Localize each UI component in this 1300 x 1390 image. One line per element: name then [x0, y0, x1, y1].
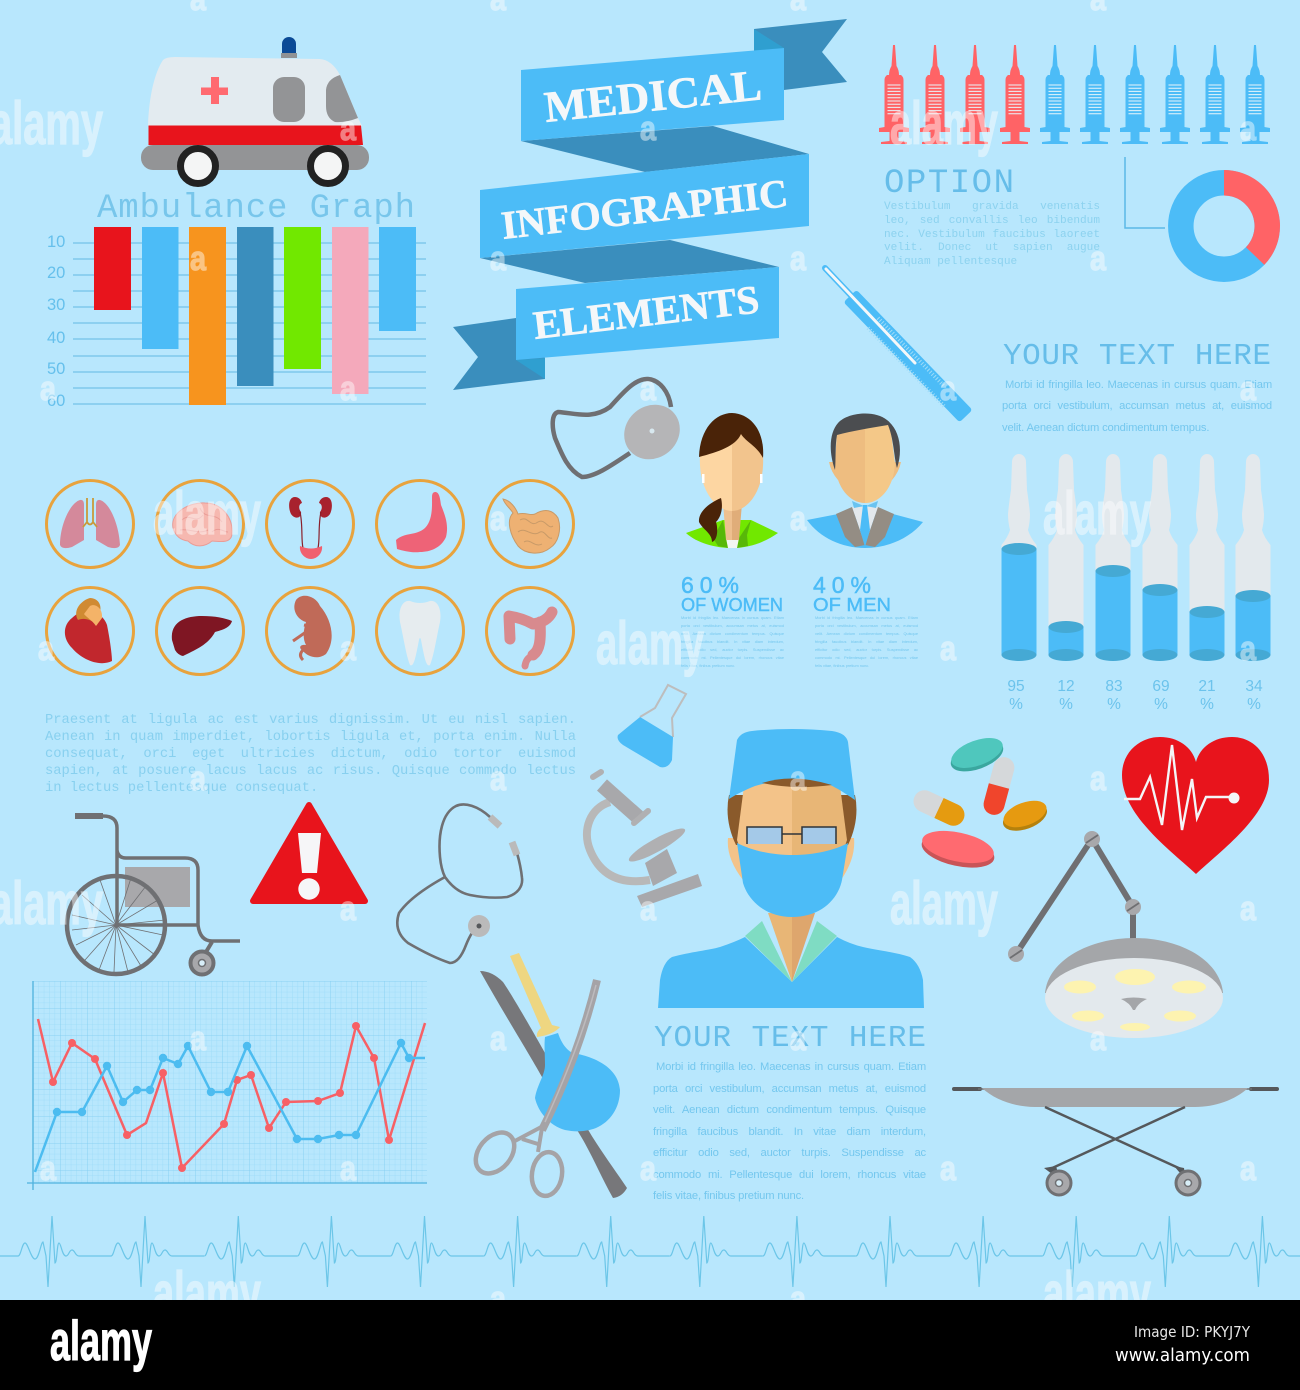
icon: surgical tools	[468, 953, 627, 1198]
surgeon face	[737, 780, 792, 855]
icon: microscope	[587, 772, 702, 907]
man ears	[829, 462, 901, 480]
footer url: www.alamy.com	[1115, 1345, 1250, 1366]
ampoule percentage labels: 95	[1007, 678, 1025, 695]
microscope tube	[602, 785, 638, 817]
watermark overlay: a	[640, 370, 657, 408]
watermark overlay: a	[1240, 110, 1257, 148]
watermark overlay: a	[790, 760, 807, 798]
ampoule percentage labels	[1007, 678, 1263, 713]
heading: Ambulance Graph: Ambulance Graph	[97, 190, 415, 228]
text block: Praesent paragraph: in lectus pellentesque consequat.	[45, 781, 318, 796]
ampoule chart	[1002, 454, 1270, 713]
stat: 40% of men: OF MEN	[813, 595, 891, 615]
watermark overlay: a	[1090, 240, 1107, 278]
watermark overlay: a	[790, 1280, 807, 1318]
stretcher handles	[954, 1087, 1277, 1091]
text block: option paragraph: leo, sed convallis leo bibendum	[884, 215, 1100, 227]
ampoule percentage labels: %	[1154, 696, 1168, 713]
text block: option paragraph: Aliquam pellentesque	[884, 256, 1017, 268]
ribbon title text: INFOGRAPHIC	[499, 170, 790, 248]
watermark overlay: a	[190, 760, 207, 798]
icon: wheelchair	[67, 816, 240, 974]
icon: large intestine	[509, 612, 552, 666]
watermark overlay: alamy	[1043, 480, 1151, 547]
text block: men small print	[815, 615, 918, 668]
pink pill	[919, 825, 997, 873]
ampoule percentage labels: %	[1009, 696, 1023, 713]
yellow nozzle	[510, 953, 560, 1037]
stretcher wheels	[1047, 1171, 1200, 1195]
text block: women small print	[681, 615, 784, 668]
line chart	[27, 981, 427, 1190]
text block: lower paragraph: velit. Aenean dictum condimentum tempus. Quisque	[653, 1104, 926, 1116]
heading: OPTION: OPTION	[884, 165, 1014, 203]
text block: lower paragraph: commodo mi. Pellentesque dui lorem, rhoncus vitae	[653, 1168, 926, 1180]
watermark overlay: a	[40, 370, 57, 408]
wheelchair seat	[125, 867, 190, 907]
man hair	[831, 414, 900, 470]
ECG line strip	[0, 1216, 1300, 1287]
donut red segment	[1224, 170, 1280, 265]
footer logo: alamy	[50, 1309, 152, 1372]
surgeon body	[658, 937, 924, 1008]
text block: lower paragraph: fringilla faucibus blandit. In vitae diam interdum,	[653, 1126, 926, 1138]
watermark overlay: a	[340, 1150, 357, 1188]
text block: Praesent paragraph	[45, 713, 576, 796]
ambulance cross	[201, 77, 228, 104]
text block: men small print: velit. Aenean dictum condimentum tempus. Quisque	[815, 631, 918, 636]
ambulance side window	[273, 77, 305, 122]
watermark overlay: a	[790, 500, 807, 538]
text block: men small print: felis vitae, finibus pretium nunc.	[815, 663, 869, 668]
watermark overlay: a	[340, 370, 357, 408]
teal pill	[947, 732, 1007, 778]
ampoule 69%	[1142, 454, 1178, 661]
text block: lower paragraph	[653, 1061, 926, 1202]
surgeon neck	[768, 913, 792, 982]
lamp dome	[1045, 938, 1223, 993]
chart grid	[33, 981, 427, 1183]
text block: option paragraph: velit. Donec ut sapien augue	[884, 242, 1100, 254]
stat: 40% of men	[813, 572, 891, 615]
icon: small intestine	[503, 499, 560, 553]
watermark overlay: a	[1240, 370, 1257, 408]
surgeon ears	[728, 838, 854, 880]
watermark overlay: alamy	[153, 1260, 261, 1327]
surgeon collar	[745, 921, 837, 982]
text block: option paragraph	[884, 201, 1100, 268]
rubber bulb	[535, 1033, 620, 1131]
text block: women small print: fringilla faucibus blandit. In vitae diam interdum,	[681, 639, 784, 644]
text block: lower paragraph: efficitur odio sed, auctor turpis. Suspendisse ac	[653, 1147, 926, 1159]
ribbon title text: ELEMENTS	[531, 276, 761, 348]
watermark overlay: a	[490, 500, 507, 538]
ampoule percentage labels: 34	[1245, 678, 1263, 695]
text block: women small print: porta orci vestibulum, accumsan metus at, euismod	[681, 623, 784, 628]
ambulance front window	[326, 75, 358, 122]
surgeon hair	[728, 795, 856, 845]
text block: Praesent paragraph: Aenean in quam imperdiet, lobortis ligula et, porta enim. Nulla	[45, 730, 576, 745]
watermark overlay: a	[490, 1020, 507, 1058]
icon: surgeon	[658, 729, 924, 1008]
ampoule percentage labels: %	[1107, 696, 1121, 713]
chart axis labels: 50	[47, 360, 65, 378]
man lapels	[836, 507, 894, 547]
text block: men small print: efficitur odio sed, auctor turpis. Suspendisse ac	[815, 647, 918, 652]
red series	[38, 1019, 425, 1172]
woman neck	[723, 503, 732, 540]
donut chart	[1181, 170, 1280, 269]
chart axis labels: 40	[47, 329, 65, 347]
blue syringes	[1040, 45, 1270, 144]
footer mask	[0, 1300, 1300, 1390]
text block: top right paragraph	[1002, 379, 1272, 434]
woman face	[700, 425, 732, 511]
ribbon tail right	[754, 19, 847, 90]
text block: Praesent paragraph: Praesent at ligula ac est varius dignissim. Ut eu nisl sapien.	[45, 713, 576, 728]
icon: heart with ECG	[1122, 737, 1269, 874]
watermark overlay: alamy	[153, 480, 261, 547]
ampoule 83%	[1096, 454, 1130, 661]
title ribbon	[453, 19, 847, 390]
orange pill	[999, 795, 1051, 836]
surgeon cap	[729, 729, 855, 800]
ampoule 34%	[1236, 454, 1270, 661]
scalpel	[480, 971, 627, 1198]
ampoule percentage labels: %	[1059, 696, 1073, 713]
icon: warning triangle	[253, 805, 365, 901]
watermark overlay: a	[940, 370, 957, 408]
text block: women small print: Morbi id fringilla leo. Maecenas in cursus quam. Etiam	[681, 615, 784, 620]
icon: stethoscope	[397, 804, 522, 963]
stat: 60% of women: OF WOMEN	[681, 595, 783, 615]
icon: man avatar	[807, 414, 923, 548]
icon: stomach	[396, 492, 447, 552]
watermark overlay: a	[340, 890, 357, 928]
footer bar	[0, 1300, 1300, 1390]
text block: top right paragraph: Morbi id fringilla leo. Maecenas in cursus quam. Etiam	[1005, 379, 1272, 391]
organ icon grid	[46, 480, 574, 674]
ambulance chassis	[141, 145, 369, 170]
icon: woman avatar	[686, 413, 778, 548]
icon: fetus	[293, 596, 332, 660]
orange capsule	[910, 787, 968, 829]
watermark overlay: a	[490, 240, 507, 278]
chart axis labels: 60	[47, 392, 65, 410]
ribbon tail left	[453, 318, 545, 390]
stethoscope ear tips	[490, 817, 517, 855]
bar chart: ambulance graph	[47, 227, 426, 410]
heading: YOUR TEXT HERE lower: YOUR TEXT HERE	[654, 1021, 926, 1056]
watermark overlay: a	[340, 630, 357, 668]
chart axis labels	[47, 233, 65, 410]
watermark overlay: alamy	[890, 870, 998, 937]
text block: option paragraph: nec. Vestibulum faucibus laoreet	[884, 229, 1100, 241]
stat: 60% of women	[681, 572, 783, 615]
lamp arms	[1016, 839, 1133, 954]
text block: lower paragraph: porta orci vestibulum, accumsan metus at, euismod	[653, 1082, 926, 1094]
chart bars	[94, 227, 416, 405]
watermark overlay: a	[640, 1150, 657, 1188]
ampoule 21%	[1190, 454, 1224, 661]
text block: women small print: felis vitae, finibus pretium nunc.	[681, 663, 735, 668]
ribbon folds	[480, 126, 809, 283]
icon: lungs	[60, 498, 120, 548]
icon: thermometer	[825, 268, 972, 422]
woman earrings	[702, 474, 762, 483]
man tie	[852, 501, 878, 508]
bracket line	[1125, 157, 1165, 228]
chart axis labels: 10	[47, 233, 65, 251]
lamp joints	[1008, 831, 1141, 962]
watermark overlay: a	[940, 1150, 957, 1188]
red capsule	[981, 755, 1017, 817]
text block: top right paragraph: porta orci vestibulum, accumsan metus at, euismod	[1002, 400, 1272, 412]
text block: men small print: Morbi id fringilla leo. Maecenas in cursus quam. Etiam	[815, 615, 918, 620]
wheelchair handle	[75, 813, 103, 819]
ampoule percentage labels: %	[1247, 696, 1261, 713]
watermark overlay: a	[790, 1020, 807, 1058]
icon: pills	[910, 732, 1051, 873]
text block: women small print: commodo mi. Pellentesque dui lorem, rhoncus vitae	[681, 655, 784, 660]
ampoule percentage labels: 12	[1057, 678, 1075, 695]
icon: stretcher	[954, 1088, 1277, 1195]
watermark overlay: a	[38, 630, 55, 668]
watermark overlay: a	[790, 240, 807, 278]
text block: Praesent paragraph: consequat, orci eget ultricies dictum, odio tortor euismod	[45, 747, 576, 762]
ribbon bands	[480, 48, 809, 360]
ampoule percentage labels: 21	[1198, 678, 1216, 695]
text block: men small print: fringilla faucibus blandit. In vitae diam interdum,	[815, 639, 918, 644]
ambulance wheels	[180, 148, 346, 184]
icon: tooth	[399, 601, 441, 665]
watermark overlay: a	[190, 1020, 207, 1058]
chart axis labels: 20	[47, 264, 65, 282]
wheelchair frame	[103, 816, 240, 941]
text block: top right paragraph: velit. Aenean dictum condimentum tempus.	[1002, 422, 1209, 434]
ribbon title text: MEDICAL	[542, 60, 764, 132]
stretcher legs	[1045, 1107, 1185, 1170]
hemostat forceps	[468, 980, 597, 1198]
ambulance red stripe	[148, 126, 363, 145]
watermark overlay: a	[490, 1280, 507, 1318]
watermark overlay: a	[1090, 760, 1107, 798]
watermark overlay: a	[1240, 630, 1257, 668]
lamp center handle	[1121, 998, 1147, 1010]
watermark overlay: a	[1090, 1020, 1107, 1058]
microscope base	[637, 874, 702, 907]
watermark overlay: a	[40, 1150, 57, 1188]
wheelchair caster	[190, 942, 214, 974]
microscope body	[645, 849, 677, 886]
icon: liver	[172, 616, 232, 656]
watermark overlay: a	[190, 240, 207, 278]
watermark overlay: alamy	[596, 610, 704, 677]
surgeon mask	[737, 843, 848, 917]
watermark overlay: a	[340, 110, 357, 148]
wheelchair wheel	[67, 876, 165, 974]
ampoule 95%	[1002, 454, 1036, 661]
footer image id: Image ID: PKYJ7Y	[1134, 1323, 1251, 1341]
lamp disc	[1045, 958, 1223, 1038]
blue series	[35, 1039, 425, 1172]
stat: 40% of men: 40%	[813, 572, 871, 598]
watermark overlay: a	[940, 630, 957, 668]
text block: women small print: efficitur odio sed, auctor turpis. Suspendisse ac	[681, 647, 784, 652]
organ circles	[46, 480, 574, 674]
ampoule percentage labels: 83	[1105, 678, 1123, 695]
text block: lower paragraph: felis vitae, finibus pretium nunc.	[653, 1190, 804, 1202]
icon: heart organ	[65, 598, 112, 663]
ampoule 12%	[1048, 454, 1084, 661]
watermark overlay: a	[1240, 1150, 1257, 1188]
watermark overlay: alamy	[1043, 1260, 1151, 1327]
icon: kidneys and bladder	[289, 497, 332, 559]
stretcher bed	[982, 1088, 1248, 1107]
icon: flask	[618, 685, 686, 767]
icon: surgical lamp	[1008, 831, 1223, 1038]
syringe row	[879, 45, 1270, 144]
woman ponytail	[699, 498, 722, 542]
ampoule percentage labels: 69	[1152, 678, 1170, 695]
icon: ambulance	[141, 37, 369, 184]
heading: YOUR TEXT HERE top: YOUR TEXT HERE	[1003, 339, 1271, 374]
man jacket	[807, 514, 923, 548]
icon: brain	[173, 503, 232, 546]
text block: option paragraph: Vestibulum gravida venenatis	[884, 201, 1100, 213]
icon: head mirror	[553, 379, 691, 477]
microscope stage	[626, 824, 688, 866]
woman hair	[699, 413, 763, 458]
ampoule percentage labels: %	[1200, 696, 1214, 713]
lamp bulbs	[1064, 969, 1206, 1031]
microscope arm	[587, 802, 650, 881]
stat: 60% of women: 60%	[681, 572, 739, 598]
man face	[835, 425, 865, 503]
watermark overlay: a	[490, 760, 507, 798]
stethoscope chest piece	[468, 915, 490, 937]
red syringes	[879, 45, 1030, 144]
chart axis labels: 30	[47, 296, 65, 314]
text block: Praesent paragraph: sapien, at posuere lacus lacus ac risus. Quisque commodo lectus	[45, 764, 576, 779]
text block: men small print: commodo mi. Pellentesque dui lorem, rhoncus vitae	[815, 655, 918, 660]
watermark overlay: alamy	[890, 90, 998, 157]
ribbon title text	[499, 60, 790, 348]
watermark overlay: a	[640, 890, 657, 928]
text block: men small print: porta orci vestibulum, accumsan metus at, euismod	[815, 623, 918, 628]
text block: women small print: velit. Aenean dictum condimentum tempus. Quisque	[681, 631, 784, 636]
chart axes	[27, 981, 427, 1190]
woman jacket	[686, 520, 778, 548]
watermark overlay: a	[1240, 890, 1257, 928]
surgeon glasses	[747, 827, 836, 844]
text block: lower paragraph: Morbi id fringilla leo. Maecenas in cursus quam. Etiam	[656, 1061, 926, 1073]
watermark overlay: a	[640, 110, 657, 148]
